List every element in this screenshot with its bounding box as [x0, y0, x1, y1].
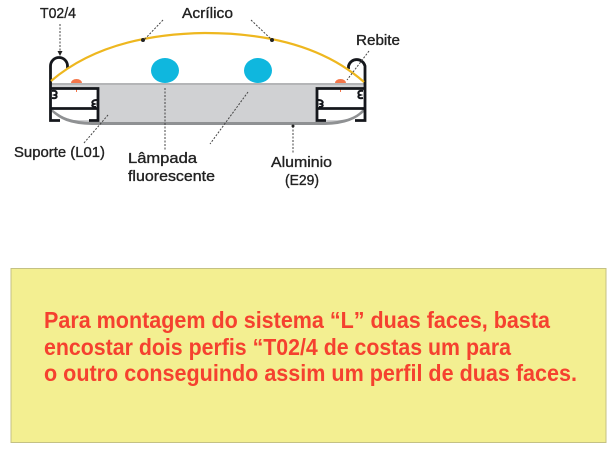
label: Acrílico: Acrílico [182, 5, 233, 22]
rivet right [335, 79, 346, 92]
note text: encostar dois perfis “T02/4 de costas um para [44, 334, 511, 360]
aluminium body [51, 83, 365, 124]
label: Rebite: Rebite [356, 32, 400, 49]
label: Lâmpada fluorescente: Lâmpada [128, 150, 198, 167]
label: Aluminio (E29): (E29) [285, 172, 319, 189]
label: Lâmpada fluorescente: fluorescente [128, 168, 215, 185]
fluorescent lamp right [244, 58, 272, 83]
panel: yellow note [11, 268, 606, 442]
profile T02/4 left [50, 58, 98, 120]
profile T02/4 right [317, 60, 365, 120]
rivet left [71, 79, 82, 92]
right profile interior [317, 88, 364, 108]
label: T02/4: T02/4 [40, 5, 76, 22]
right corner interior [318, 109, 363, 120]
left corner interior [52, 109, 97, 120]
fluorescent lamp left [151, 58, 179, 83]
panel: cross-section diagram [14, 5, 400, 189]
leader lines [58, 20, 369, 153]
note text: Para montagem do sistema “L” duas faces, basta [44, 307, 550, 333]
note background [11, 268, 606, 442]
label: Suporte (L01): Suporte (L01) [14, 144, 105, 161]
left profile interior [51, 88, 98, 108]
acrylic dome [51, 33, 364, 82]
note text: o outro conseguindo assim um perfil de duas faces. [44, 360, 577, 386]
label: Aluminio (E29): Aluminio [271, 154, 332, 171]
